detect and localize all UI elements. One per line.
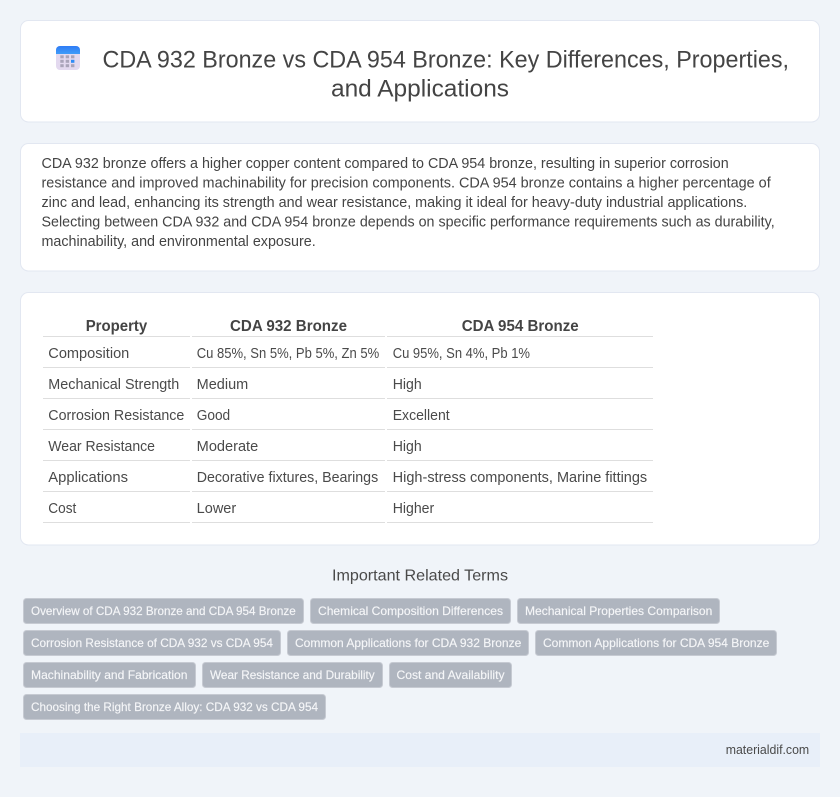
chip: Wear Resistance and Durability bbox=[210, 668, 375, 682]
title: and Applications bbox=[331, 76, 509, 102]
table header row: CDA 932 Bronze bbox=[230, 318, 347, 335]
panel: comparison table bbox=[20, 292, 820, 545]
row: cost: Cost bbox=[48, 501, 76, 517]
row: composition: Cu 85%, Sn 5%, Pb 5%, Zn 5% bbox=[197, 346, 379, 362]
chip bbox=[24, 598, 304, 624]
chip: Machinability and Fabrication bbox=[31, 668, 188, 682]
row: wear resistance: Wear Resistance bbox=[48, 439, 155, 455]
heading: important related terms: Important Related Terms bbox=[332, 568, 508, 584]
chip: Common Applications for CDA 954 Bronze bbox=[543, 636, 770, 650]
chip: Overview of CDA 932 Bronze and CDA 954 Bronze bbox=[31, 604, 296, 618]
row: composition bbox=[48, 346, 530, 362]
chip bbox=[310, 598, 510, 624]
row: wear resistance bbox=[48, 439, 422, 455]
chip: Chemical Composition Differences bbox=[318, 604, 503, 618]
text block: introduction paragraph: zinc and lead, enhancing its strength and wear resistance, making it ideal for heavy-duty industrial applications. bbox=[42, 195, 747, 211]
icon: calendar bbox=[56, 46, 80, 70]
row: corrosion resistance: Corrosion Resistance bbox=[48, 408, 184, 424]
chip bbox=[24, 662, 196, 688]
title: CDA 932 Bronze vs CDA 954 Bronze: Key Differences, Properties, bbox=[102, 46, 789, 74]
row: mechanical strength: High bbox=[393, 377, 422, 393]
chip: Mechanical Properties Comparison bbox=[525, 604, 712, 618]
row: corrosion resistance bbox=[48, 408, 450, 424]
row: corrosion resistance: Excellent bbox=[393, 408, 450, 424]
chip bbox=[24, 630, 280, 656]
table header row: Property bbox=[86, 318, 147, 335]
chip: Cost and Availability bbox=[396, 668, 504, 682]
chip bbox=[536, 630, 776, 656]
row: wear resistance: High bbox=[393, 439, 422, 455]
chip bbox=[288, 630, 528, 656]
row: composition: Cu 95%, Sn 4%, Pb 1% bbox=[393, 346, 530, 362]
chip bbox=[202, 662, 382, 688]
title bbox=[102, 46, 789, 102]
row: applications bbox=[48, 470, 647, 486]
table: property comparison bbox=[43, 318, 653, 522]
chip: Corrosion Resistance of CDA 932 vs CDA 954 bbox=[31, 636, 273, 650]
row: applications: Decorative fixtures, Bearings bbox=[197, 470, 378, 486]
text block: introduction paragraph: CDA 932 bronze offers a higher copper content compared to CDA 954 bronze, resulting in superior corrosion bbox=[42, 156, 729, 172]
tag chips: related terms bbox=[24, 598, 776, 720]
chip bbox=[390, 662, 512, 688]
table header row: CDA 954 Bronze bbox=[462, 318, 579, 335]
row: mechanical strength: Mechanical Strength bbox=[48, 377, 179, 393]
row: cost: Lower bbox=[197, 501, 236, 517]
row: cost: Higher bbox=[393, 501, 434, 517]
chip: Common Applications for CDA 932 Bronze bbox=[295, 636, 522, 650]
row: applications: High-stress components, Marine fittings bbox=[393, 470, 647, 486]
panel: introduction bbox=[20, 144, 820, 271]
row: cost bbox=[48, 501, 434, 517]
text block: introduction paragraph bbox=[42, 156, 775, 250]
text block: introduction paragraph: machinability, and environmental exposure. bbox=[42, 234, 316, 250]
row: corrosion resistance: Good bbox=[197, 408, 230, 424]
row: composition: Composition bbox=[48, 346, 129, 362]
table header row bbox=[86, 318, 579, 335]
footer bar bbox=[20, 733, 820, 767]
text block: introduction paragraph: Selecting between CDA 932 and CDA 954 bronze depends on specific performance requirements such as durability, bbox=[42, 214, 775, 230]
chip bbox=[24, 694, 326, 720]
row: applications: Applications bbox=[48, 470, 128, 486]
chip: Choosing the Right Bronze Alloy: CDA 932 vs CDA 954 bbox=[31, 700, 318, 714]
panel: title header bbox=[20, 20, 820, 122]
chip bbox=[518, 598, 720, 624]
text block: introduction paragraph: resistance and improved machinability for precision components. CDA 954 bronze contains a higher percentage of bbox=[42, 176, 772, 192]
row: mechanical strength bbox=[48, 377, 422, 393]
row: mechanical strength: Medium bbox=[197, 377, 248, 393]
row: wear resistance: Moderate bbox=[197, 439, 258, 455]
footer source text: materialdif.com bbox=[726, 742, 809, 757]
